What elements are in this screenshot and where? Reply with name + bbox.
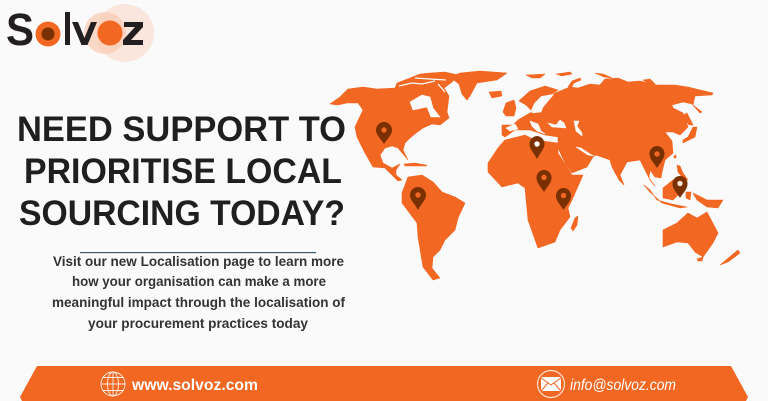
pin: North Africa bbox=[530, 136, 544, 159]
pin: Central Africa bbox=[536, 170, 552, 192]
Baltic Sea (background cut-out) bbox=[532, 95, 553, 113]
body text: meaningful impact through the localisation of bbox=[52, 295, 346, 310]
Africa bbox=[488, 135, 583, 248]
Greenland bbox=[450, 71, 507, 100]
pin: South America bbox=[410, 187, 426, 210]
pin: Indonesia bbox=[672, 176, 688, 198]
Borneo bbox=[663, 180, 680, 200]
Arctic island: New Siberian bbox=[643, 79, 655, 84]
Sulawesi bbox=[686, 192, 691, 200]
email link: info@solvoz.com bbox=[570, 377, 676, 394]
body text bbox=[52, 254, 346, 331]
Scandinavia bbox=[519, 86, 558, 110]
Madagascar bbox=[571, 216, 578, 231]
New Zealand bbox=[720, 250, 740, 265]
Cuba bbox=[404, 163, 427, 166]
North America bbox=[330, 72, 458, 181]
body text: your procurement practices today bbox=[88, 316, 308, 331]
pin: South-East Asia bbox=[649, 146, 665, 168]
Arctic island: Severnaya bbox=[595, 73, 612, 78]
Arctic island: Novaya Zemlya bbox=[568, 78, 581, 88]
heading: PRIORITISE LOCAL bbox=[24, 152, 342, 191]
body text: Visit our new Localisation page to learn more bbox=[53, 254, 344, 269]
logo: Solvoz: S bbox=[6, 4, 34, 55]
Arctic island: Svalbard bbox=[526, 74, 545, 78]
Eurasia bbox=[502, 78, 713, 186]
heading: SOURCING TODAY? bbox=[19, 194, 345, 233]
icon: envelope bbox=[538, 370, 564, 398]
Iceland bbox=[489, 91, 502, 98]
Philippines bbox=[677, 165, 688, 180]
British Isles bbox=[503, 100, 516, 116]
body text: how your organisation can make a more bbox=[72, 274, 326, 289]
New Guinea bbox=[693, 193, 723, 208]
world map bbox=[330, 71, 740, 280]
heading: NEED SUPPORT TO bbox=[17, 110, 346, 149]
Tasmania bbox=[697, 257, 703, 261]
icon: globe bbox=[101, 372, 125, 396]
heading bbox=[17, 110, 346, 233]
Black Sea (background cut-out) bbox=[548, 120, 566, 128]
Australia bbox=[663, 212, 718, 257]
South America bbox=[402, 175, 465, 280]
website link: www.solvoz.com bbox=[131, 377, 258, 394]
pin: East Africa bbox=[556, 188, 571, 210]
pin: North America bbox=[376, 122, 392, 144]
Taiwan bbox=[674, 155, 676, 158]
Mediterranean inlets (background cut-out) bbox=[506, 121, 545, 134]
logo: Solvoz bbox=[6, 4, 154, 62]
footer banner bbox=[20, 366, 748, 401]
Caspian Sea (background cut-out) bbox=[574, 121, 582, 136]
Arctic channels (background cut-out) bbox=[399, 78, 446, 92]
Arctic island: Franz Josef bbox=[556, 72, 572, 76]
Japan and Sakhalin bbox=[682, 113, 697, 143]
Sumatra and Java bbox=[644, 185, 687, 208]
divider rule bbox=[80, 252, 316, 253]
Persian Gulf (background cut-out) bbox=[576, 147, 594, 156]
Hudson Bay (background cut-out) bbox=[410, 95, 440, 117]
